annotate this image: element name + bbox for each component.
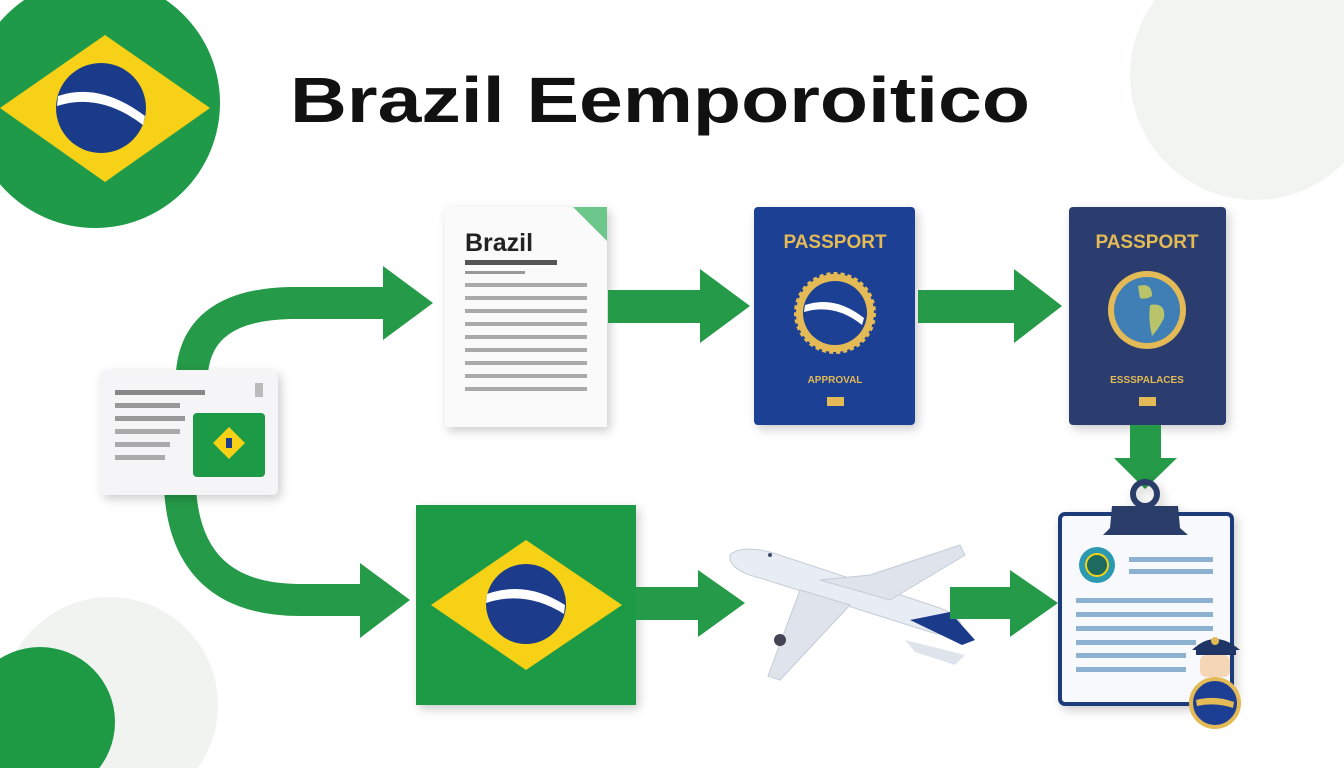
flag: Brazil [416,505,636,705]
passport: globe: PASSPORT [1095,232,1199,253]
passport: globe [1069,207,1226,425]
decorative circle top right [1130,0,1344,200]
passport: globe: ESSSPALACES [1110,375,1184,386]
icon: airplane [730,545,975,680]
card: ID [100,370,278,495]
decorative circle bottom left [2,597,218,768]
clipboard [1060,482,1232,704]
arrow: passport to passport [918,269,1062,343]
passport: approval [754,207,915,425]
document: Brazil: Brazil [465,229,533,257]
icon: green circle bottom left [0,647,115,768]
passport: approval: PASSPORT [783,232,887,253]
arrow: flag to plane [636,570,745,637]
title: Brazil Eemporoitico [290,64,1030,136]
arrow: curved up [192,266,433,372]
arrow: document to passport [608,269,750,343]
icon: Brazil flag circle top left [0,0,220,228]
arrow: plane to clipboard [950,570,1058,637]
arrow: down to clipboard [1114,425,1177,489]
icon: pilot [1191,637,1240,727]
document: Brazil [445,207,607,427]
passport: approval: APPROVAL [808,375,862,386]
arrow: curved down [180,488,410,638]
